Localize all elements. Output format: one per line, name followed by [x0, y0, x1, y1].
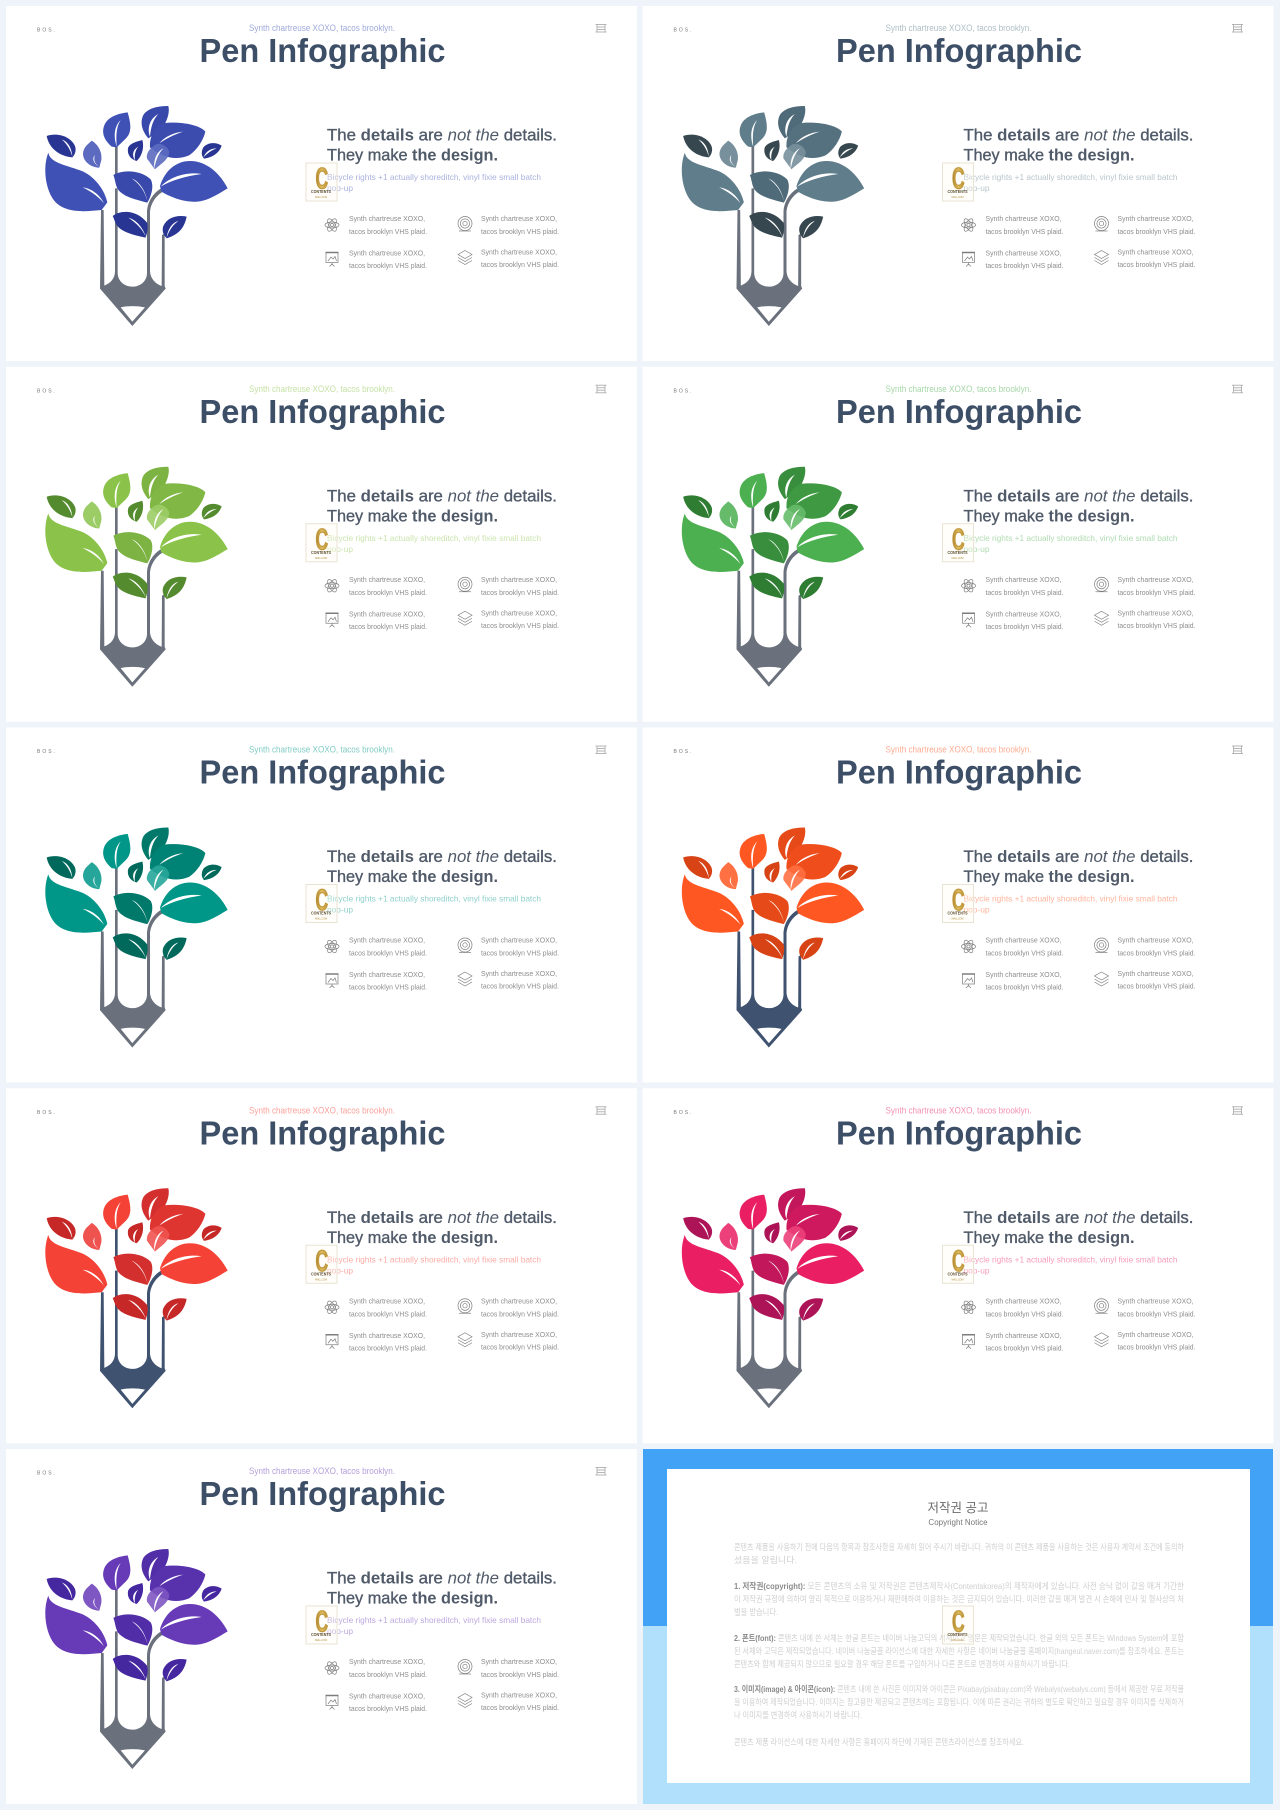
brand mark: BOS.: [674, 388, 693, 394]
body text: [327, 172, 541, 193]
notice section 2: 콘텐츠와 함께 제공되지 않으므로 필요할 경우 해당 폰트를 구입하거나 다른 폰트로 변경하여 사용하시기 바랍니다.: [734, 1659, 1070, 1669]
feature: layers: tacos brooklyn VHS plaid.: [1118, 1342, 1196, 1351]
feature: atom: [325, 214, 427, 236]
feature: layers: Synth chartreuse XOXO,: [481, 248, 557, 256]
heading: They make the design.: [964, 146, 1134, 164]
feature: layers: [458, 248, 559, 269]
feature: atom: tacos brooklyn VHS plaid.: [986, 948, 1064, 958]
feature: layers: tacos brooklyn VHS plaid.: [1118, 982, 1196, 990]
feature: target: tacos brooklyn VHS plaid.: [1118, 227, 1196, 236]
feature: atom: tacos brooklyn VHS plaid.: [986, 1309, 1064, 1318]
panel: red pen infographic: [6, 1088, 637, 1443]
feature: layers: [458, 969, 559, 990]
panel: teal pen infographic: [6, 728, 637, 1082]
heading: The details are not the details.: [964, 848, 1194, 866]
feature: target: Synth chartreuse XOXO,: [1118, 575, 1194, 584]
feature: presentation: [326, 1692, 427, 1713]
heading: They make the design.: [964, 507, 1134, 525]
watermark: CONTENTS: [948, 910, 968, 916]
feature: layers: [458, 1330, 559, 1351]
feature: target: [1094, 1296, 1196, 1318]
title: Pen Infographic: [836, 1114, 1082, 1151]
feature: atom: tacos brooklyn VHS plaid.: [986, 588, 1064, 597]
heading: [327, 126, 557, 164]
watermark: [942, 524, 974, 562]
heading: [327, 1570, 557, 1608]
panel: purple pen infographic: [6, 1449, 637, 1804]
watermark: CONTENTS: [311, 1632, 331, 1637]
feature: layers: tacos brooklyn VHS plaid.: [481, 621, 559, 630]
illustration: pen tree: [45, 467, 228, 687]
watermark: CONTENTS: [311, 189, 331, 194]
feature: target: tacos brooklyn VHS plaid.: [481, 1309, 559, 1318]
feature: presentation: [326, 970, 427, 992]
feature: atom: tacos brooklyn VHS plaid.: [986, 227, 1064, 236]
feature: target: Synth chartreuse XOXO,: [481, 1657, 557, 1666]
notice section 1: 1. 저작권(copyright): 모든 콘텐츠의 소유 및 저작권은 콘텐츠제작사(Contentskorea)의 제작자에게 있습니다. 사전 승낙 없이 값을 매겨 기간한: [734, 1581, 1184, 1591]
watermark: MALL.COM: [315, 556, 327, 560]
notice intro: [734, 1542, 1184, 1565]
feature: layers: Synth chartreuse XOXO,: [481, 1690, 557, 1700]
feature: target: Synth chartreuse XOXO,: [481, 575, 557, 584]
feature: layers: tacos brooklyn VHS plaid.: [1118, 621, 1196, 630]
feature: presentation: Synth chartreuse XOXO,: [349, 248, 425, 258]
feature: presentation: [326, 248, 427, 270]
heading: The details are not the details.: [964, 487, 1194, 505]
brand mark: BOS.: [37, 28, 57, 34]
body text: pop-up: [964, 1265, 990, 1275]
feature: atom: [962, 575, 1064, 597]
body text: pop-up: [964, 904, 990, 914]
feature: target: tacos brooklyn VHS plaid.: [481, 948, 559, 958]
icon: menu: [1232, 385, 1243, 393]
body text: Bicycle rights +1 actually shoreditch, vinyl fixie small batch: [327, 533, 541, 543]
feature: layers: tacos brooklyn VHS plaid.: [481, 1703, 559, 1712]
feature: atom: [325, 936, 427, 958]
feature: presentation: [326, 1331, 427, 1352]
body text: Bicycle rights +1 actually shoreditch, vinyl fixie small batch: [327, 1254, 541, 1264]
body text: Bicycle rights +1 actually shoreditch, vinyl fixie small batch: [964, 533, 1178, 543]
feature: atom: tacos brooklyn VHS plaid.: [349, 588, 427, 597]
brand mark: BOS.: [674, 1110, 693, 1116]
feature: presentation: tacos brooklyn VHS plaid.: [986, 261, 1064, 270]
heading: [964, 487, 1194, 525]
notice section 1: 벌을 받습니다.: [734, 1607, 778, 1617]
feature: layers: tacos brooklyn VHS plaid.: [481, 1342, 559, 1351]
heading: The details are not the details.: [327, 848, 557, 866]
notice title: 저작권 공고: [928, 1501, 988, 1515]
body text: [964, 894, 1178, 914]
panel: orange pen infographic: [642, 728, 1274, 1082]
title: Pen Infographic: [836, 393, 1082, 430]
feature: presentation: [962, 609, 1064, 631]
watermark: MALL.COM: [315, 916, 327, 920]
feature: target: [458, 214, 559, 236]
feature: atom: Synth chartreuse XOXO,: [986, 575, 1062, 584]
body text: pop-up: [327, 544, 353, 554]
watermark: [306, 1245, 337, 1283]
heading: The details are not the details.: [327, 1570, 557, 1588]
feature: atom: tacos brooklyn VHS plaid.: [349, 1670, 427, 1679]
feature: target: [1094, 214, 1196, 236]
body text: pop-up: [964, 544, 990, 554]
watermark: CONTENTS: [948, 1632, 968, 1637]
notice section 3: 3. 이미지(image) & 아이콘(icon): 콘텐츠 내에 쓴 사진은 이미지와 아이콘은 Pixabay(pixabay.com)와 Webalys(webalys.com) 등에서 제공한 무료 저작물: [734, 1684, 1184, 1694]
feature: atom: tacos brooklyn VHS plaid.: [349, 227, 427, 236]
heading: [327, 1209, 557, 1247]
watermark: [306, 163, 337, 201]
feature: layers: Synth chartreuse XOXO,: [481, 969, 557, 978]
body text: Bicycle rights +1 actually shoreditch, vinyl fixie small batch: [327, 1615, 541, 1625]
panel: green pen infographic: [642, 367, 1274, 722]
watermark: C: [316, 524, 328, 557]
watermark: [942, 884, 974, 922]
brand mark: BOS.: [37, 388, 57, 394]
brand mark: BOS.: [37, 1470, 57, 1476]
feature: presentation: tacos brooklyn VHS plaid.: [986, 622, 1064, 631]
illustration: pen tree: [682, 106, 864, 326]
notice section 2: 된 서체와 고딕은 제작되었습니다. 네이버 나눔글꼴 라이선스에 대한 자세한 사항은 네이버 나눔글꼴 홈페이지(hangeul.naver.com)를 참조하세요. 폰트는: [734, 1646, 1184, 1656]
body text: [327, 1254, 541, 1275]
notice section 3: [734, 1684, 1184, 1720]
feature: atom: Synth chartreuse XOXO,: [349, 1296, 425, 1305]
feature: atom: Synth chartreuse XOXO,: [986, 1296, 1062, 1305]
notice section 1: 이 저작권 규정에 의하여 영리 목적으로 이용하거나 재판매하여 이용하는 것은 금지되어 있습니다. 이러한 값을 매겨 발견 시 손해에 민사 및 형사상의 처: [734, 1594, 1184, 1604]
title: Pen Infographic: [836, 32, 1082, 69]
feature: target: tacos brooklyn VHS plaid.: [481, 588, 559, 597]
notice intro: 콘텐츠 제품을 사용하기 전에 다음의 항목과 참조사항을 자세히 읽어 주시기 바랍니다. 귀하의 이 콘텐츠 제품을 사용하는 것은 사용자 계약서 조건에 동의하: [734, 1542, 1184, 1552]
feature: layers: [458, 1690, 559, 1712]
feature: target: [458, 575, 559, 597]
icon: menu: [596, 746, 606, 754]
tagline: Synth chartreuse XOXO, tacos brooklyn.: [886, 1105, 1032, 1115]
feature: presentation: [962, 1331, 1064, 1352]
feature: presentation: [326, 609, 427, 631]
body text: [964, 533, 1178, 554]
feature: presentation: Synth chartreuse XOXO,: [986, 609, 1062, 618]
feature: presentation: tacos brooklyn VHS plaid.: [986, 982, 1064, 992]
body text: pop-up: [964, 183, 990, 193]
feature: atom: Synth chartreuse XOXO,: [986, 936, 1062, 944]
feature: presentation: [962, 248, 1064, 270]
illustration: pen tree: [45, 827, 228, 1047]
watermark: [942, 1606, 974, 1644]
heading: The details are not the details.: [964, 1209, 1194, 1227]
brand mark: BOS.: [37, 1110, 57, 1116]
feature: atom: [325, 1296, 427, 1318]
feature: target: tacos brooklyn VHS plaid.: [481, 1670, 559, 1679]
feature: atom: Synth chartreuse XOXO,: [349, 575, 425, 584]
heading: The details are not the details.: [327, 126, 557, 144]
panel: light green pen infographic: [6, 367, 637, 722]
watermark: CONTENTS: [311, 550, 331, 555]
icon: menu: [1232, 746, 1243, 754]
watermark: C: [952, 1245, 965, 1278]
notice section 3: 나 이미지를 변경하여 사용하시기 바랍니다.: [734, 1710, 862, 1720]
feature: layers: tacos brooklyn VHS plaid.: [481, 260, 559, 269]
watermark: MALL.COM: [952, 556, 964, 560]
illustration: pen tree: [682, 467, 864, 687]
body text: Bicycle rights +1 actually shoreditch, vinyl fixie small batch: [964, 172, 1178, 182]
tagline: Synth chartreuse XOXO, tacos brooklyn.: [886, 384, 1032, 394]
heading: [327, 848, 557, 886]
feature: layers: Synth chartreuse XOXO,: [1118, 248, 1194, 256]
feature: layers: [458, 608, 559, 630]
feature: target: tacos brooklyn VHS plaid.: [1118, 948, 1196, 958]
title: Pen Infographic: [200, 1114, 446, 1151]
heading: [327, 487, 557, 525]
heading: The details are not the details.: [964, 126, 1194, 144]
notice section 3: 을 이용하여 제작되었습니다. 이미지는 참고용만 제공되고 콘텐츠에는 포함됩니다. 이에 따른 권리는 귀하의 별도로 확인하고 필요할 경우 이미지를 삭제하거: [734, 1697, 1184, 1707]
title: Pen Infographic: [200, 32, 446, 69]
feature: presentation: Synth chartreuse XOXO,: [986, 970, 1062, 979]
body text: [327, 894, 541, 914]
feature: target: [1094, 575, 1196, 597]
feature: layers: [1094, 1330, 1196, 1351]
heading: [964, 848, 1194, 886]
notice section 2: [734, 1633, 1184, 1669]
title: Pen Infographic: [200, 754, 446, 790]
body text: Bicycle rights +1 actually shoreditch, vinyl fixie small batch: [327, 172, 541, 182]
watermark: C: [952, 163, 965, 196]
illustration: pen tree: [45, 106, 228, 326]
title: Pen Infographic: [200, 1475, 446, 1512]
feature: atom: Synth chartreuse XOXO,: [349, 936, 425, 944]
feature: target: Synth chartreuse XOXO,: [1118, 936, 1194, 944]
feature: target: [458, 1296, 559, 1318]
watermark: C: [952, 524, 965, 557]
feature: target: tacos brooklyn VHS plaid.: [1118, 588, 1196, 597]
notice footer: 콘텐츠 제품 라이선스에 대한 자세한 사항은 홈페이지 하단에 기재된 콘텐츠라이선스를 참조하세요.: [734, 1737, 1024, 1747]
body text: pop-up: [327, 1626, 353, 1636]
feature: target: tacos brooklyn VHS plaid.: [481, 227, 559, 236]
watermark: CONTENTS: [948, 189, 968, 194]
feature: target: Synth chartreuse XOXO,: [481, 214, 557, 223]
notice intro: 셨음을 알립니다.: [734, 1555, 797, 1565]
feature: layers: Synth chartreuse XOXO,: [1118, 1330, 1194, 1339]
heading: They make the design.: [327, 507, 498, 525]
icon: menu: [596, 385, 606, 393]
icon: menu: [596, 1107, 606, 1114]
feature: atom: Synth chartreuse XOXO,: [349, 214, 425, 223]
body text: [327, 533, 541, 554]
icon: menu: [596, 1468, 606, 1475]
illustration: pen tree: [45, 1188, 228, 1408]
heading: They make the design.: [327, 868, 498, 886]
notice section 2: 2. 폰트(font): 콘텐츠 내에 쓴 서체는 한글 폰트는 네이버 나눔고딕의 서체이고 영문은 제작되었습니다. 한글 외의 모든 폰트는 Windows System에 포함: [734, 1633, 1184, 1643]
feature: target: [458, 1657, 559, 1679]
feature: presentation: Synth chartreuse XOXO,: [349, 609, 425, 618]
feature: layers: [1094, 969, 1196, 990]
watermark: CONTENTS: [311, 910, 331, 916]
icon: menu: [1232, 24, 1243, 32]
watermark: MALL.COM: [952, 195, 964, 199]
watermark: MALL.COM: [952, 1638, 964, 1642]
feature: atom: tacos brooklyn VHS plaid.: [349, 948, 427, 958]
feature: layers: Synth chartreuse XOXO,: [481, 1330, 557, 1339]
feature: atom: Synth chartreuse XOXO,: [986, 214, 1062, 223]
watermark: MALL.COM: [952, 1277, 964, 1281]
feature: presentation: Synth chartreuse XOXO,: [986, 248, 1062, 258]
feature: target: [458, 936, 559, 958]
body text: [964, 1254, 1178, 1275]
feature: target: [1094, 936, 1196, 958]
title: Pen Infographic: [200, 393, 446, 430]
heading: The details are not the details.: [327, 1209, 557, 1227]
illustration: pen tree: [682, 827, 864, 1047]
feature: atom: tacos brooklyn VHS plaid.: [349, 1309, 427, 1318]
heading: They make the design.: [964, 1229, 1134, 1247]
panel: pink pen infographic: [642, 1088, 1274, 1443]
feature: presentation: tacos brooklyn VHS plaid.: [349, 982, 427, 992]
body text: Bicycle rights +1 actually shoreditch, vinyl fixie small batch: [964, 1254, 1178, 1264]
watermark: CONTENTS: [311, 1271, 331, 1276]
watermark: CONTENTS: [948, 550, 968, 555]
feature: atom: [325, 1657, 427, 1679]
watermark: C: [316, 1606, 328, 1639]
brand mark: BOS.: [674, 28, 693, 34]
heading: They make the design.: [327, 146, 498, 164]
tagline: Synth chartreuse XOXO, tacos brooklyn.: [886, 744, 1032, 754]
feature: presentation: Synth chartreuse XOXO,: [349, 1331, 425, 1340]
feature: layers: Synth chartreuse XOXO,: [1118, 608, 1194, 617]
feature: layers: Synth chartreuse XOXO,: [481, 608, 557, 617]
feature: target: Synth chartreuse XOXO,: [481, 936, 557, 944]
body text: pop-up: [327, 183, 353, 193]
watermark: C: [316, 163, 328, 196]
title: Pen Infographic: [836, 754, 1082, 790]
watermark: [942, 163, 974, 201]
panel: slate pen infographic: [642, 6, 1274, 361]
heading: They make the design.: [327, 1590, 498, 1608]
watermark: MALL.COM: [952, 916, 964, 920]
watermark: C: [316, 1245, 328, 1278]
feature: layers: tacos brooklyn VHS plaid.: [481, 982, 559, 990]
illustration: pen tree: [45, 1549, 228, 1769]
notice subtitle: Copyright Notice: [928, 1518, 988, 1527]
feature: layers: Synth chartreuse XOXO,: [1118, 969, 1194, 978]
watermark: [306, 884, 337, 922]
body text: pop-up: [327, 904, 353, 914]
tagline: Synth chartreuse XOXO, tacos brooklyn.: [249, 744, 395, 754]
heading: They make the design.: [327, 1229, 498, 1247]
icon: menu: [1232, 1107, 1243, 1114]
tagline: Synth chartreuse XOXO, tacos brooklyn.: [249, 1105, 395, 1115]
feature: presentation: tacos brooklyn VHS plaid.: [349, 261, 427, 270]
watermark: C: [952, 884, 965, 917]
feature: presentation: Synth chartreuse XOXO,: [986, 1331, 1062, 1340]
feature: presentation: Synth chartreuse XOXO,: [349, 1692, 425, 1700]
watermark: C: [316, 884, 328, 917]
feature: target: tacos brooklyn VHS plaid.: [1118, 1309, 1196, 1318]
watermark: [306, 1606, 337, 1644]
panel: copyright notice: [643, 1449, 1273, 1804]
icon: menu: [596, 24, 606, 32]
feature: target: Synth chartreuse XOXO,: [481, 1296, 557, 1305]
body text: Bicycle rights +1 actually shoreditch, vinyl fixie small batch: [327, 894, 541, 904]
feature: atom: [325, 575, 427, 597]
watermark: CONTENTS: [948, 1271, 968, 1276]
feature: target: Synth chartreuse XOXO,: [1118, 1296, 1194, 1305]
feature: atom: [962, 214, 1064, 236]
feature: presentation: tacos brooklyn VHS plaid.: [349, 1343, 427, 1352]
feature: atom: [962, 1296, 1064, 1318]
tagline: Synth chartreuse XOXO, tacos brooklyn.: [249, 1466, 395, 1476]
feature: atom: Synth chartreuse XOXO,: [349, 1657, 425, 1666]
feature: layers: [1094, 248, 1196, 269]
watermark: MALL.COM: [315, 1638, 327, 1642]
heading: They make the design.: [964, 868, 1134, 886]
tagline: Synth chartreuse XOXO, tacos brooklyn.: [886, 23, 1032, 33]
tagline: Synth chartreuse XOXO, tacos brooklyn.: [249, 23, 395, 33]
panel: blue pen infographic: [6, 6, 637, 361]
watermark: [942, 1245, 974, 1283]
feature: presentation: tacos brooklyn VHS plaid.: [986, 1343, 1064, 1352]
watermark: C: [952, 1606, 965, 1639]
tagline: Synth chartreuse XOXO, tacos brooklyn.: [249, 384, 395, 394]
feature: presentation: tacos brooklyn VHS plaid.: [349, 622, 427, 631]
body text: [964, 172, 1178, 193]
feature: presentation: tacos brooklyn VHS plaid.: [349, 1704, 427, 1713]
body text: pop-up: [327, 1265, 353, 1275]
feature: target: Synth chartreuse XOXO,: [1118, 214, 1194, 223]
feature: atom: [962, 936, 1064, 958]
feature: layers: [1094, 608, 1196, 630]
brand mark: BOS.: [674, 749, 693, 755]
illustration: pen tree: [682, 1188, 864, 1408]
feature: presentation: Synth chartreuse XOXO,: [349, 970, 425, 979]
heading: [964, 126, 1194, 164]
feature: layers: tacos brooklyn VHS plaid.: [1118, 260, 1196, 269]
heading: [964, 1209, 1194, 1247]
brand mark: BOS.: [37, 749, 57, 755]
heading: The details are not the details.: [327, 487, 557, 505]
watermark: MALL.COM: [315, 195, 327, 199]
body text: [327, 1615, 541, 1636]
feature: presentation: [962, 970, 1064, 992]
notice section 1: [734, 1581, 1184, 1617]
body text: Bicycle rights +1 actually shoreditch, vinyl fixie small batch: [964, 894, 1178, 904]
watermark: MALL.COM: [315, 1277, 327, 1281]
watermark: [306, 524, 337, 562]
